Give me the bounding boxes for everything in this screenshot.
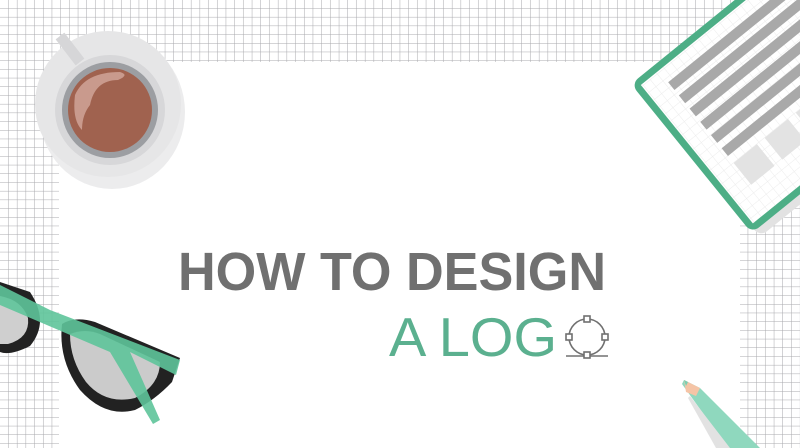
icon: vector path circle: [566, 316, 608, 358]
title: a logo: A LOG: [389, 306, 557, 368]
paper: [59, 62, 740, 448]
icon: coffee cup: [35, 31, 185, 189]
icon: notebook: [631, 0, 800, 239]
title: how to design: HOW TO DESIGN: [178, 242, 606, 302]
icon: glasses: [0, 282, 180, 424]
icon: pencil: [682, 380, 760, 448]
